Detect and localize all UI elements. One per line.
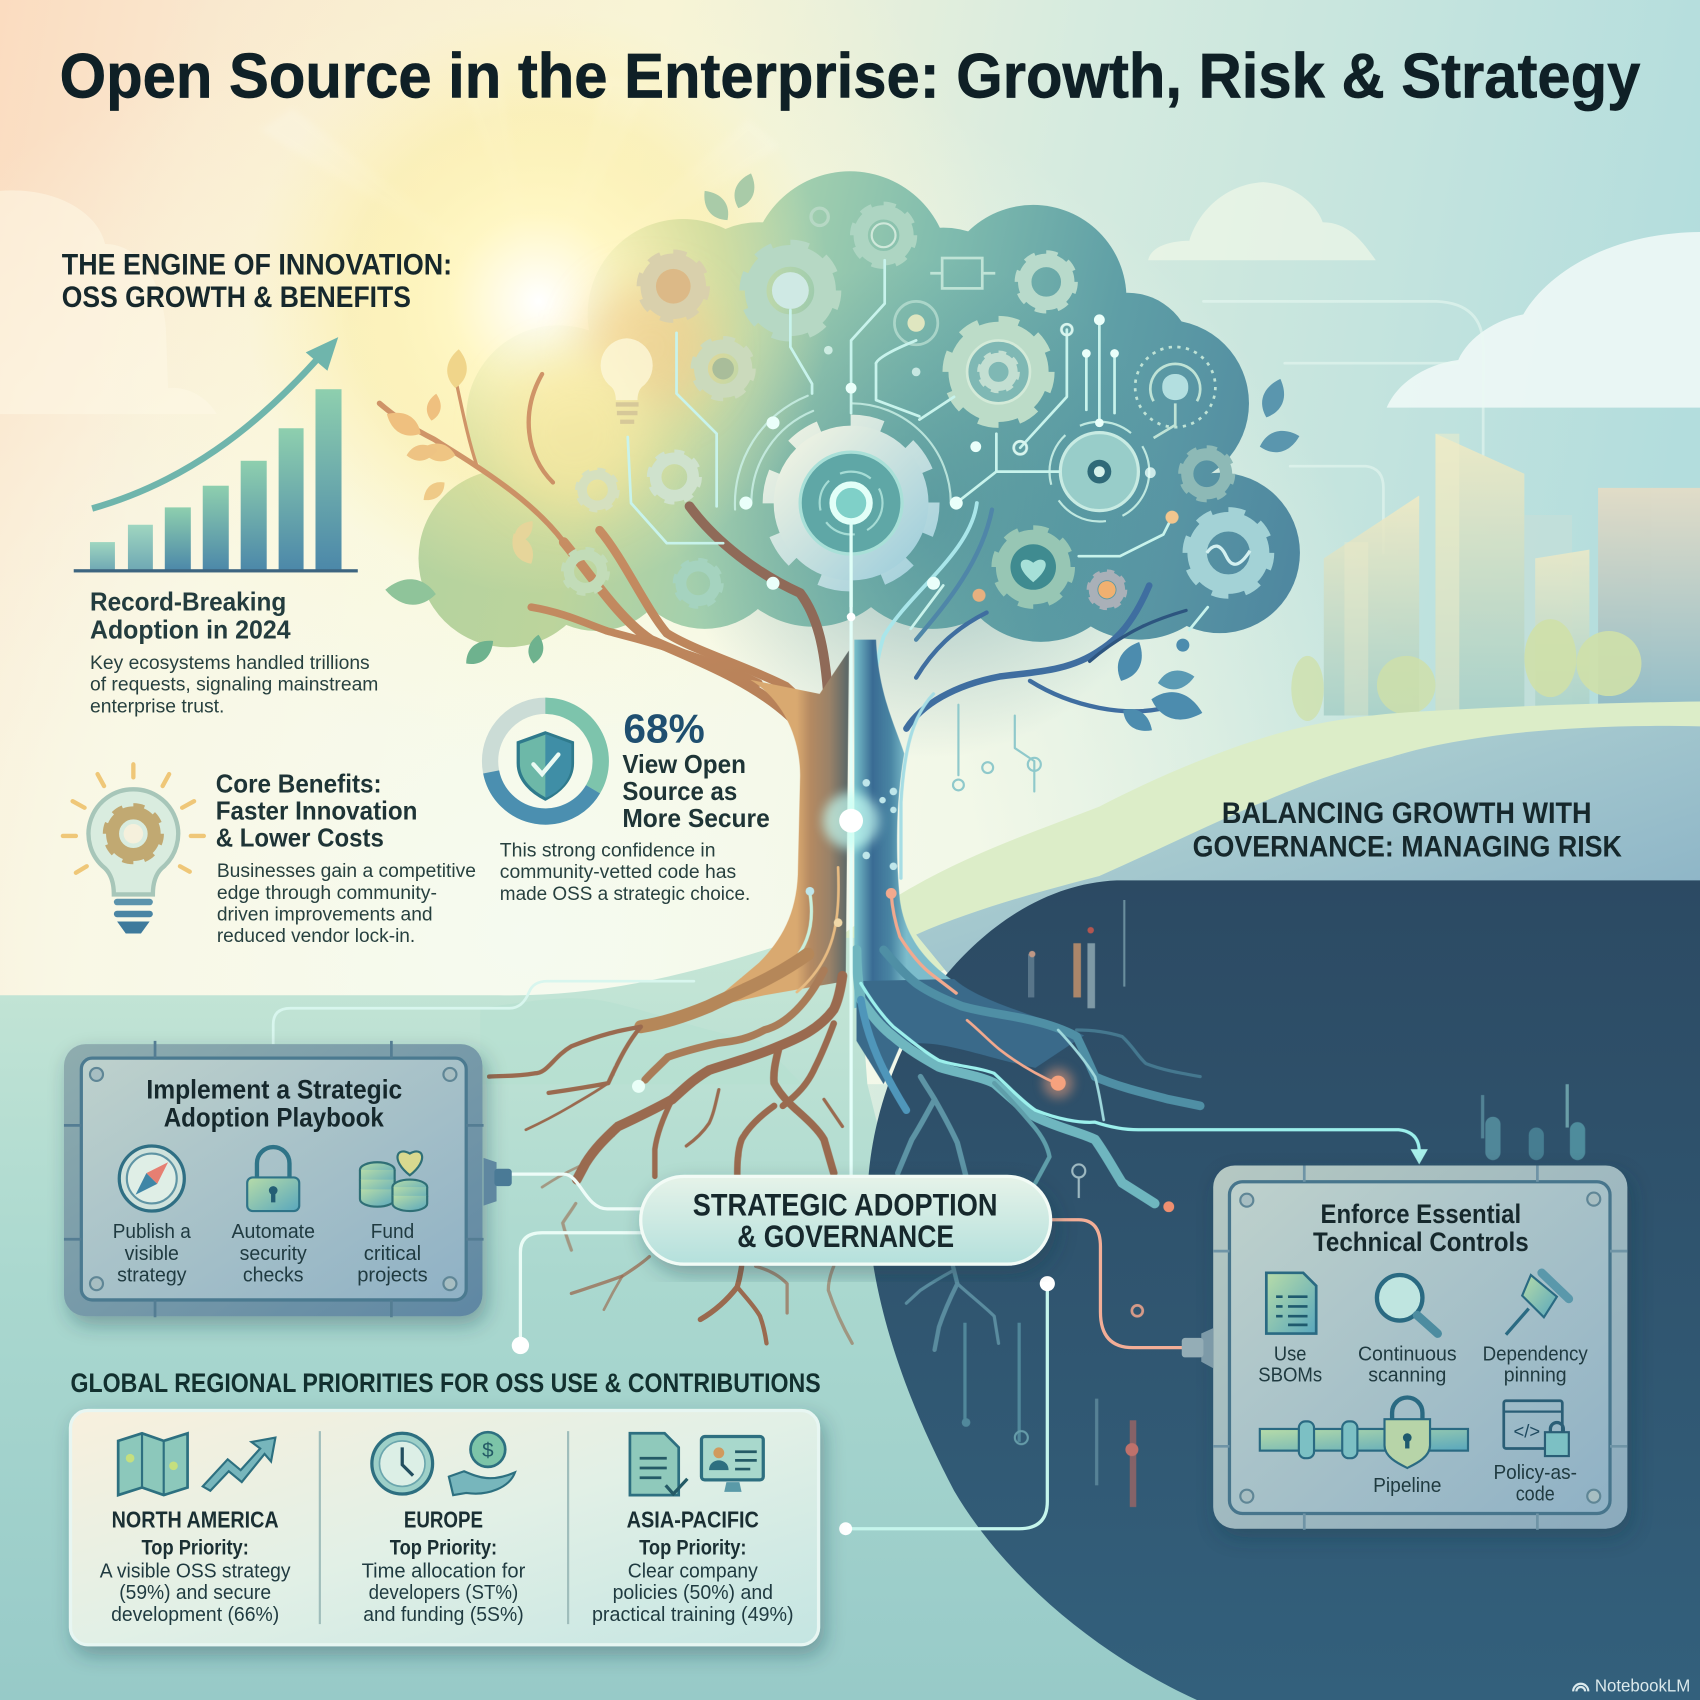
watermark: NotebookLM bbox=[1595, 1675, 1690, 1695]
controls labels row one: Dependency bbox=[1483, 1343, 1588, 1366]
text: 68 percent view open source: made OSS a strategic choice. bbox=[500, 883, 750, 905]
north america text: NORTH AMERICA bbox=[112, 1507, 279, 1533]
lens gear bbox=[1049, 422, 1149, 521]
buildings bbox=[1324, 434, 1700, 716]
north america text: development (66%) bbox=[111, 1603, 279, 1626]
roots blue bbox=[857, 950, 1200, 1350]
icon: policy as code bbox=[1504, 1401, 1569, 1456]
asia-pacific text: policies (50%) and bbox=[613, 1581, 773, 1604]
lightbulb crown icon bbox=[601, 338, 653, 422]
playbook title: Implement a Strategic bbox=[146, 1073, 402, 1104]
icon: rising zigzag arrow bbox=[203, 1438, 275, 1491]
heading: engine of innovation: OSS GROWTH & BENEFITS bbox=[62, 282, 411, 314]
controls title bbox=[1313, 1198, 1529, 1257]
playbook labels: checks bbox=[243, 1264, 304, 1287]
text: core benefits: Faster Innovation bbox=[216, 796, 417, 826]
heading: title: Open Source in the Enterprise: Growth, Risk & Strategy bbox=[60, 42, 1640, 112]
tree crown bbox=[418, 171, 1300, 647]
controls title: Enforce Essential bbox=[1321, 1198, 1521, 1229]
sun glow bbox=[0, 0, 1084, 867]
pill: strategic adoption and governance: & GOVERNANCE bbox=[737, 1219, 954, 1254]
small hanging circuits bbox=[953, 705, 1041, 791]
blue root mass bbox=[857, 979, 1084, 1084]
crown shading around centre bbox=[672, 260, 1171, 759]
clouds right bbox=[1148, 182, 1700, 408]
right branches bbox=[906, 585, 1186, 729]
north america text: A visible OSS strategy bbox=[100, 1559, 291, 1582]
europe text: Top Priority: bbox=[390, 1535, 497, 1560]
north america text: Top Priority: bbox=[141, 1535, 249, 1560]
heading: balancing growth bbox=[1193, 798, 1622, 864]
controls labels row two: Policy-as- bbox=[1493, 1461, 1577, 1484]
underground pillars bbox=[962, 900, 1585, 1507]
circuit connectors bbox=[273, 981, 1187, 1535]
left branches bbox=[379, 369, 829, 737]
text: record-breaking adoption: of requests, signaling mainstream bbox=[90, 674, 378, 696]
heading: balancing growth: BALANCING GROWTH WITH bbox=[1222, 798, 1592, 830]
text: 68 percent view open source: View Open bbox=[622, 749, 746, 779]
playbook labels: Publish a bbox=[113, 1220, 191, 1243]
playbook labels bbox=[113, 1220, 428, 1287]
glowing circuit roots bbox=[861, 893, 1419, 1151]
europe text: and funding (5S%) bbox=[363, 1603, 524, 1626]
icon: hand with coin: $ bbox=[482, 1439, 494, 1462]
donut 68 percent with shield bbox=[490, 706, 601, 817]
icon: hand with coin bbox=[449, 1432, 515, 1495]
europe text bbox=[362, 1507, 525, 1626]
arcs around the main gear bbox=[735, 396, 951, 510]
icon: policy document bbox=[630, 1433, 687, 1495]
central glowing trunk line bbox=[823, 520, 879, 1182]
icon: SBOM document bbox=[1266, 1273, 1316, 1334]
text: 68 percent view open source: 68% bbox=[623, 706, 705, 752]
text: 68 percent view open source: Source as bbox=[622, 776, 737, 806]
text: core benefits bbox=[216, 769, 476, 947]
heading: global regional priorities: GLOBAL REGIONAL PRIORITIES FOR OSS USE & CONTRIBUTIONS bbox=[70, 1367, 821, 1398]
playbook labels: Fund bbox=[371, 1220, 414, 1243]
controls labels row one bbox=[1258, 1343, 1588, 1386]
panel: essential technical controls bbox=[1182, 1165, 1627, 1530]
icon: compass bbox=[119, 1146, 184, 1211]
controls labels row one: Continuous bbox=[1358, 1343, 1457, 1366]
text: core benefits: & Lower Costs bbox=[216, 823, 384, 853]
main gear bbox=[777, 429, 925, 607]
text: core benefits: Core Benefits: bbox=[216, 769, 382, 799]
circuit board device bbox=[894, 258, 1215, 438]
controls labels row one: SBOMs bbox=[1258, 1363, 1322, 1386]
text: 68 percent view open source: More Secure bbox=[622, 803, 770, 833]
sun glow over crown bbox=[239, 0, 846, 607]
icon: lightbulb with gear bbox=[63, 764, 204, 933]
playbook title: Adoption Playbook bbox=[164, 1101, 385, 1132]
text: 68 percent view open source: This strong confidence in bbox=[500, 840, 716, 862]
playbook labels: visible bbox=[125, 1242, 179, 1265]
trunk left brown bbox=[705, 651, 849, 1008]
panel: regional priorities bbox=[70, 1411, 819, 1645]
heading: engine of innovation bbox=[62, 249, 452, 314]
icon: coins and heart bbox=[360, 1151, 427, 1211]
trunk right blue bbox=[854, 640, 954, 1008]
playbook labels: critical bbox=[364, 1242, 421, 1265]
icon: locked pipeline bbox=[1260, 1398, 1468, 1468]
lower cream fade bbox=[0, 0, 1700, 1084]
text: record-breaking adoption: Adoption in 2024 bbox=[90, 615, 291, 645]
gears in crown bbox=[565, 207, 1267, 607]
pill: strategic adoption and governance bbox=[641, 1176, 1051, 1264]
text: record-breaking adoption: Key ecosystems handled trillions bbox=[90, 652, 370, 674]
controls labels row two: Pipeline bbox=[1373, 1474, 1441, 1497]
text: 68 percent view open source bbox=[500, 706, 770, 905]
controls labels row one: scanning bbox=[1368, 1363, 1446, 1386]
asia-pacific text: Top Priority: bbox=[639, 1535, 746, 1560]
north america text bbox=[100, 1507, 291, 1626]
asia-pacific text bbox=[592, 1507, 794, 1626]
text: record-breaking adoption: enterprise trust. bbox=[90, 695, 224, 717]
controls labels row one: Use bbox=[1274, 1343, 1306, 1366]
controls labels row two: code bbox=[1516, 1483, 1555, 1506]
icon: clock bbox=[372, 1433, 433, 1494]
heading: balancing growth: GOVERNANCE: MANAGING RISK bbox=[1193, 832, 1622, 864]
hill blue band bbox=[916, 726, 1700, 981]
playbook title bbox=[146, 1073, 402, 1132]
circuit lines in crown bbox=[628, 260, 1208, 630]
bar chart bbox=[74, 337, 358, 572]
icon: training monitor bbox=[701, 1437, 763, 1492]
text: record-breaking adoption bbox=[90, 586, 378, 717]
circuit nodes bbox=[739, 314, 1179, 602]
blue strands from crown bbox=[870, 503, 992, 781]
europe text: Time allocation for bbox=[362, 1559, 525, 1582]
heading: engine of innovation: THE ENGINE OF INNOVATION: bbox=[62, 249, 452, 281]
trunk highlights bbox=[773, 694, 933, 992]
asia-pacific text: Clear company bbox=[628, 1559, 759, 1582]
playbook labels: strategy bbox=[117, 1264, 187, 1287]
text: core benefits: driven improvements and bbox=[217, 903, 433, 925]
land lower left bbox=[0, 938, 1301, 1700]
text: core benefits: edge through community- bbox=[217, 882, 437, 904]
text: record-breaking adoption: Record-Breaking bbox=[90, 586, 286, 616]
roots brown bbox=[489, 954, 852, 1343]
controls labels row two bbox=[1373, 1461, 1577, 1506]
clouds left bbox=[0, 190, 217, 414]
north america text: (59%) and secure bbox=[119, 1581, 271, 1604]
text: core benefits: Businesses gain a competitive bbox=[217, 860, 476, 882]
icon: policy as code: </> bbox=[1514, 1421, 1540, 1442]
icon: map bbox=[118, 1433, 188, 1495]
root nodes bbox=[632, 888, 1174, 1316]
asia-pacific text: ASIA-PACIFIC bbox=[627, 1507, 759, 1533]
trunk dots bbox=[806, 779, 897, 927]
panel: strategic adoption playbook bbox=[64, 1041, 512, 1317]
controls labels row one: pinning bbox=[1504, 1363, 1567, 1386]
europe text: EUROPE bbox=[404, 1507, 483, 1533]
europe text: developers (ST%) bbox=[369, 1581, 518, 1604]
text: 68 percent view open source: community-vetted code has bbox=[500, 861, 736, 883]
leaves: warm and green bbox=[382, 348, 1302, 737]
playbook labels: security bbox=[240, 1242, 307, 1265]
hill green band bbox=[846, 701, 1700, 976]
warm glow on crown bbox=[499, 282, 716, 510]
hill on land bbox=[480, 998, 802, 1084]
icon: padlock bbox=[247, 1147, 299, 1211]
pill: strategic adoption and governance: STRATEGIC ADOPTION bbox=[693, 1187, 997, 1222]
dark underground bbox=[867, 880, 1700, 1700]
sun rays bbox=[260, 65, 781, 301]
top leaves bbox=[697, 170, 760, 226]
playbook labels: Automate bbox=[231, 1220, 315, 1243]
icon: push pin bbox=[1506, 1273, 1569, 1335]
faint sky circuit lines bbox=[1203, 301, 1483, 553]
asia-pacific text: practical training (49%) bbox=[592, 1603, 794, 1626]
text: core benefits: reduced vendor lock-in. bbox=[217, 925, 415, 947]
playbook labels: projects bbox=[357, 1264, 428, 1287]
trees on hill bbox=[1291, 619, 1641, 721]
icon: magnifier bbox=[1377, 1275, 1438, 1334]
controls title: Technical Controls bbox=[1313, 1226, 1529, 1257]
arrow head into controls panel bbox=[1411, 1149, 1428, 1164]
